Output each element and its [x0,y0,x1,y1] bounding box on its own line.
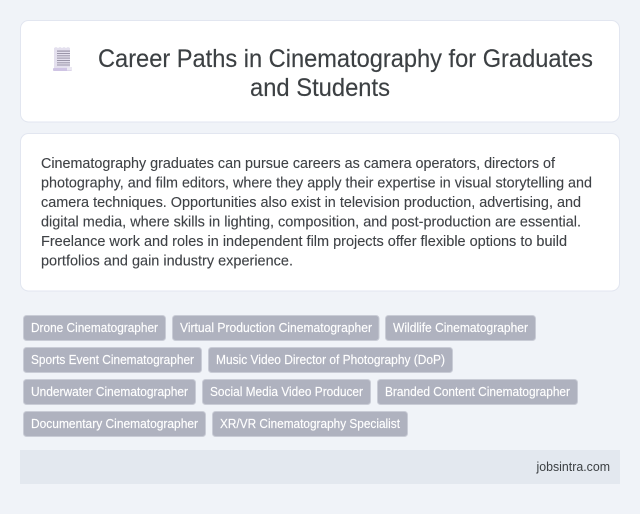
tag: Documentary Cinematographer: Documentary Cinematographer [31,417,198,431]
title [98,45,593,102]
tag: Virtual Production Cinematographer [172,316,379,340]
tag: Branded Content Cinematographer: Branded Content Cinematographer [385,385,570,399]
text block: summary: digital media, where skills in lighting, composition, and post-production are essential. [41,214,581,230]
tag: Wildlife Cinematographer: Wildlife Cinematographer [393,321,528,335]
tag: Branded Content Cinematographer [378,380,578,404]
panel: summary card [20,134,620,291]
tag: Social Media Video Producer [202,380,370,404]
text block: summary [41,156,592,270]
footer bar [20,450,620,484]
tag: Wildlife Cinematographer [386,316,536,340]
tag: Music Video Director of Photography (DoP): Music Video Director of Photography (DoP) [216,353,445,367]
icon: document scroll [53,47,72,71]
text block: summary: photography, and film editors, where they apply their expertise in visual storytelling and [41,176,592,192]
tag list: career roles [24,316,578,436]
tag: Sports Event Cinematographer [24,348,202,372]
tag: Music Video Director of Photography (DoP) [208,348,452,372]
text block: summary: Cinematography graduates can pursue careers as camera operators, directors of [41,156,556,172]
tag: Virtual Production Cinematographer: Virtual Production Cinematographer [180,321,372,335]
tag: Documentary Cinematographer [24,412,206,436]
tag: Drone Cinematographer: Drone Cinematographer [31,321,158,335]
title: Career Paths in Cinematography for Graduates [98,45,593,73]
text block: summary: camera techniques. Opportunities also exist in television production, advertising, and [41,195,581,211]
text block: summary: portfolios and gain industry experience. [41,254,293,270]
tag: Underwater Cinematographer: Underwater Cinematographer [31,385,188,399]
tag: Sports Event Cinematographer: Sports Event Cinematographer [31,353,194,367]
footer source text: jobsintra.com [536,460,610,474]
panel: title card [20,20,620,122]
title: and Students [250,74,390,102]
tag: XR/VR Cinematography Specialist [212,412,408,436]
tag: Drone Cinematographer [24,316,166,340]
tag: Underwater Cinematographer [24,380,196,404]
tag: Social Media Video Producer: Social Media Video Producer [210,385,363,399]
tag: XR/VR Cinematography Specialist: XR/VR Cinematography Specialist [220,417,400,431]
text block: summary: Freelance work and roles in independent film projects offer flexible options to build [41,234,567,250]
